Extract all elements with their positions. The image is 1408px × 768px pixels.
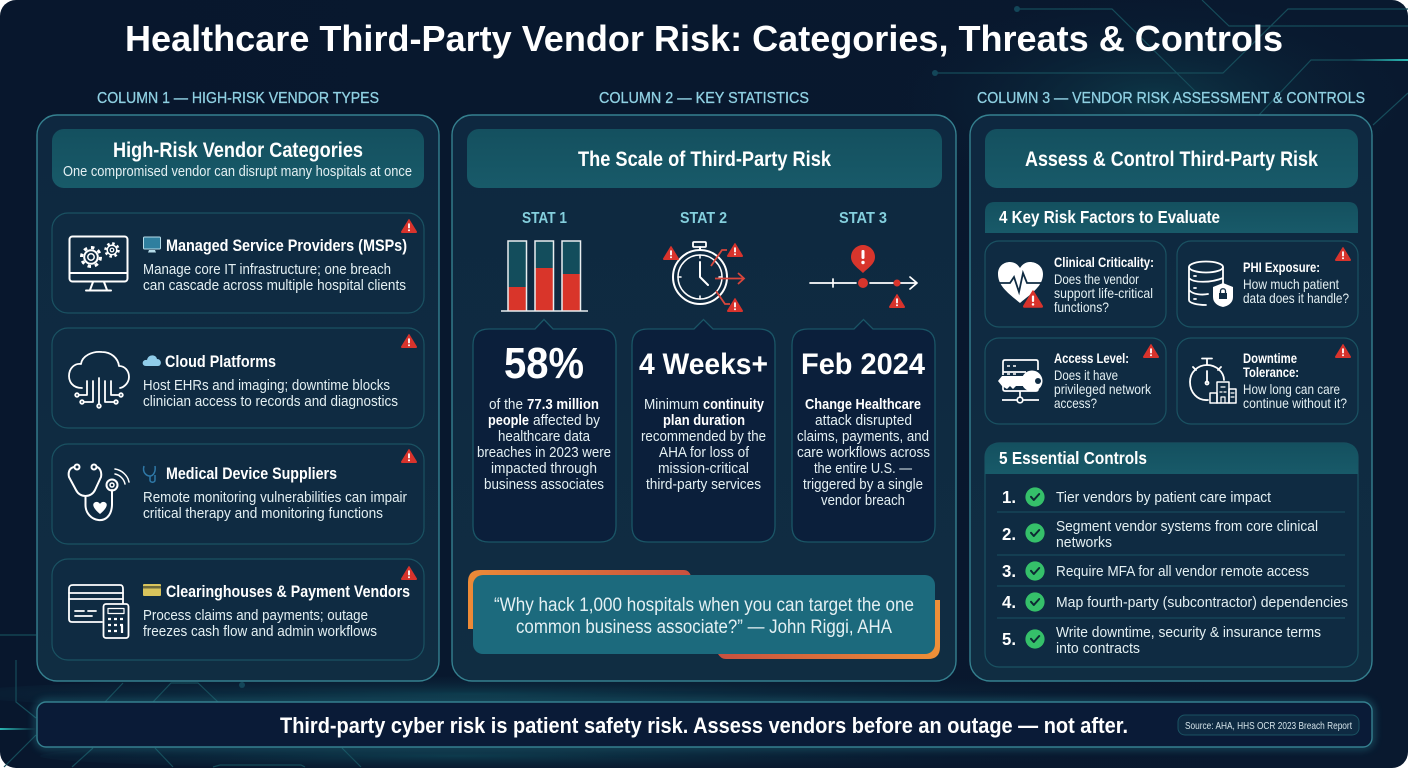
icon: small payment card: [143, 584, 161, 596]
source badge: [1178, 715, 1359, 735]
control 1: 1.: [1002, 487, 1016, 507]
stat card 3: attack disrupted: [815, 412, 912, 429]
stat 3: [792, 210, 935, 542]
factor: access level: privileged network: [1054, 382, 1151, 397]
stat card 3: care workflows across: [797, 444, 930, 461]
card: medical device suppliers: [52, 444, 424, 544]
control 4: [1002, 592, 1348, 612]
factor: access level: [985, 338, 1166, 424]
icon: alert: [1143, 344, 1159, 358]
risk factors heading: 4 Key Risk Factors to Evaluate: [999, 207, 1220, 227]
controls heading: 5 Essential Controls: [999, 448, 1147, 468]
factor: downtime tolerance: Tolerance:: [1243, 365, 1299, 380]
panel: assessment and controls: [970, 115, 1372, 681]
control 2: 2.: [1002, 524, 1016, 544]
panel: high-risk vendor types: [37, 115, 439, 681]
stat card 1: breaches in 2023 were: [477, 444, 611, 461]
controls heading: [985, 443, 1358, 474]
stat 1: [473, 210, 616, 542]
control 5: [1002, 624, 1321, 657]
card: medical device suppliers: critical therapy and monitoring functions: [143, 505, 383, 522]
icon: alert: [401, 334, 417, 348]
stat card 1: people: [488, 412, 529, 429]
icon: cloud circuit: [69, 352, 129, 408]
footer banner: Third-party cyber risk is patient safety risk. Assess vendors before an outage — not after.: [280, 713, 1128, 738]
source badge: Source: AHA, HHS OCR 2023 Breach Report: [1185, 720, 1352, 732]
stat card 1: [473, 320, 616, 542]
stat card 2: plan duration: [663, 412, 745, 429]
icon: small stethoscope: [144, 466, 155, 482]
control 5: Write downtime, security & insurance terms: [1056, 624, 1321, 641]
control 3: Require MFA for all vendor remote access: [1056, 563, 1309, 580]
card: clearinghouses and payment vendors: Process claims and payments; outage: [143, 607, 368, 624]
icon: database with shield: [1189, 262, 1233, 307]
card: medical device suppliers: Remote monitoring vulnerabilities can impair: [143, 489, 407, 506]
panel heading: [985, 129, 1358, 188]
factor: clinical criticality: Clinical Criticality:: [1054, 255, 1154, 270]
column label 1: COLUMN 1 — HIGH-RISK VENDOR TYPES: [97, 90, 379, 107]
stat card 1: affected by: [533, 412, 600, 429]
icon: alert: [401, 450, 417, 462]
stat 2: [632, 210, 775, 542]
stat card 3: triggered by a single: [803, 476, 923, 493]
factor: downtime tolerance: continue without it?: [1243, 396, 1347, 411]
factor: downtime tolerance: Downtime: [1243, 351, 1297, 366]
icon: small monitor: [144, 237, 160, 252]
panel heading: High-Risk Vendor Categories: [113, 138, 363, 162]
icon: heart with pulse: [998, 262, 1043, 307]
icon: alert: [401, 566, 417, 580]
stat card 3: Change Healthcare: [805, 396, 921, 413]
icon: card and calculator: [69, 585, 128, 638]
stat card 1: business associates: [484, 476, 604, 493]
stat card 2: third-party services: [646, 476, 761, 493]
card: cloud platforms: clinician access to records and diagnostics: [143, 393, 398, 410]
bar chart icon: [501, 241, 588, 311]
stat card 2: mission-critical: [658, 460, 749, 477]
stat card 1: of the: [489, 396, 523, 413]
factor: downtime tolerance: How long can care: [1243, 382, 1340, 397]
control 1: [1002, 487, 1272, 507]
stat card 2: Minimum: [644, 396, 699, 413]
stat card 3: [792, 320, 935, 542]
card: cloud platforms: Cloud Platforms: [165, 352, 276, 371]
stat card 2: 4 Weeks+: [639, 348, 768, 381]
card: managed service providers: Manage core IT infrastructure; one breach: [143, 261, 391, 278]
control 2: [1002, 518, 1318, 551]
factor: PHI exposure: [1177, 241, 1358, 327]
icon: small cloud: [143, 355, 161, 366]
control 3: 3.: [1002, 561, 1016, 581]
panel: key statistics: [452, 115, 956, 681]
factor: PHI exposure: How much patient: [1243, 277, 1339, 292]
stat card 1: healthcare data: [498, 428, 591, 445]
icon: alert: [1335, 248, 1351, 260]
callout: quote: [468, 570, 940, 659]
stat card 2: recommended by the: [641, 428, 766, 445]
factor: downtime tolerance: [1177, 338, 1358, 424]
risk factors heading: [985, 202, 1358, 233]
stat 2: STAT 2: [680, 210, 727, 227]
control 5: into contracts: [1056, 640, 1140, 657]
panel heading: [467, 129, 942, 188]
callout: quote: common business associate?” — John Riggi, AHA: [516, 617, 892, 638]
stat 1: STAT 1: [522, 210, 567, 227]
card: managed service providers: can cascade across multiple hospital clients: [143, 277, 406, 294]
factor: clinical criticality: support life-critical: [1054, 286, 1153, 301]
control 5: 5.: [1002, 629, 1016, 649]
card: cloud platforms: Host EHRs and imaging; downtime blocks: [143, 377, 390, 394]
timeline icon: [810, 245, 917, 308]
stat card 2: AHA for loss of: [659, 444, 750, 461]
stat card 1: 77.3 million: [527, 396, 599, 413]
card: clearinghouses and payment vendors: Clearinghouses & Payment Vendors: [166, 582, 410, 601]
stat card 1: impacted through: [491, 460, 597, 477]
card: managed service providers: Managed Service Providers (MSPs): [166, 236, 407, 255]
stopwatch icon: [663, 242, 744, 312]
icon: monitor with gears: [70, 236, 128, 290]
factor: clinical criticality: [985, 241, 1166, 327]
factor: clinical criticality: functions?: [1054, 300, 1109, 315]
factor: clinical criticality: Does the vendor: [1054, 272, 1139, 287]
column label 2: COLUMN 2 — KEY STATISTICS: [599, 90, 809, 107]
icon: alert: [401, 220, 417, 232]
factor: PHI exposure: data does it handle?: [1243, 291, 1349, 306]
card: clearinghouses and payment vendors: freezes cash flow and admin workflows: [143, 623, 377, 640]
column label 3: COLUMN 3 — VENDOR RISK ASSESSMENT & CONTROLS: [977, 90, 1365, 107]
stat card 3: Feb 2024: [801, 348, 925, 381]
control 1: Tier vendors by patient care impact: [1056, 489, 1272, 506]
title: Healthcare Third-Party Vendor Risk: Categories, Threats & Controls: [125, 18, 1283, 59]
stat card 2: continuity: [703, 396, 765, 413]
icon: alert: [1335, 344, 1351, 358]
card: medical device suppliers: Medical Device Suppliers: [166, 464, 337, 483]
callout: quote: “Why hack 1,000 hospitals when you can target the one: [494, 595, 914, 616]
card: clearinghouses and payment vendors: [52, 559, 424, 660]
control 4: Map fourth-party (subcontractor) dependencies: [1056, 594, 1348, 611]
factor: access level: Access Level:: [1054, 351, 1129, 366]
stat 3: STAT 3: [839, 210, 887, 227]
card: managed service providers: [52, 213, 424, 313]
control 2: Segment vendor systems from core clinical: [1056, 518, 1318, 535]
stat card 3: vendor breach: [821, 492, 905, 509]
factor: access level: access?: [1054, 396, 1097, 411]
panel heading: One compromised vendor can disrupt many hospitals at once: [63, 164, 412, 180]
panel heading: The Scale of Third-Party Risk: [578, 147, 831, 171]
panel heading: [52, 129, 424, 188]
controls list: [985, 443, 1358, 667]
footer banner: [37, 702, 1372, 747]
icon: server and key: [998, 360, 1042, 403]
icon: stethoscope: [69, 464, 129, 520]
icon: stopwatch and hospital: [1190, 358, 1236, 403]
card: cloud platforms: [52, 328, 424, 428]
stat card 2: [632, 320, 775, 542]
stat card 1: 58%: [504, 339, 584, 388]
stat card 3: the entire U.S. —: [814, 460, 912, 477]
control 3: [1002, 561, 1309, 581]
factor: PHI exposure: PHI Exposure:: [1243, 260, 1320, 275]
stat card 3: claims, payments, and: [797, 428, 929, 445]
panel heading: Assess & Control Third-Party Risk: [1025, 147, 1318, 171]
control 2: networks: [1056, 534, 1112, 551]
control 4: 4.: [1002, 592, 1016, 612]
factor: access level: Does it have: [1054, 368, 1118, 383]
